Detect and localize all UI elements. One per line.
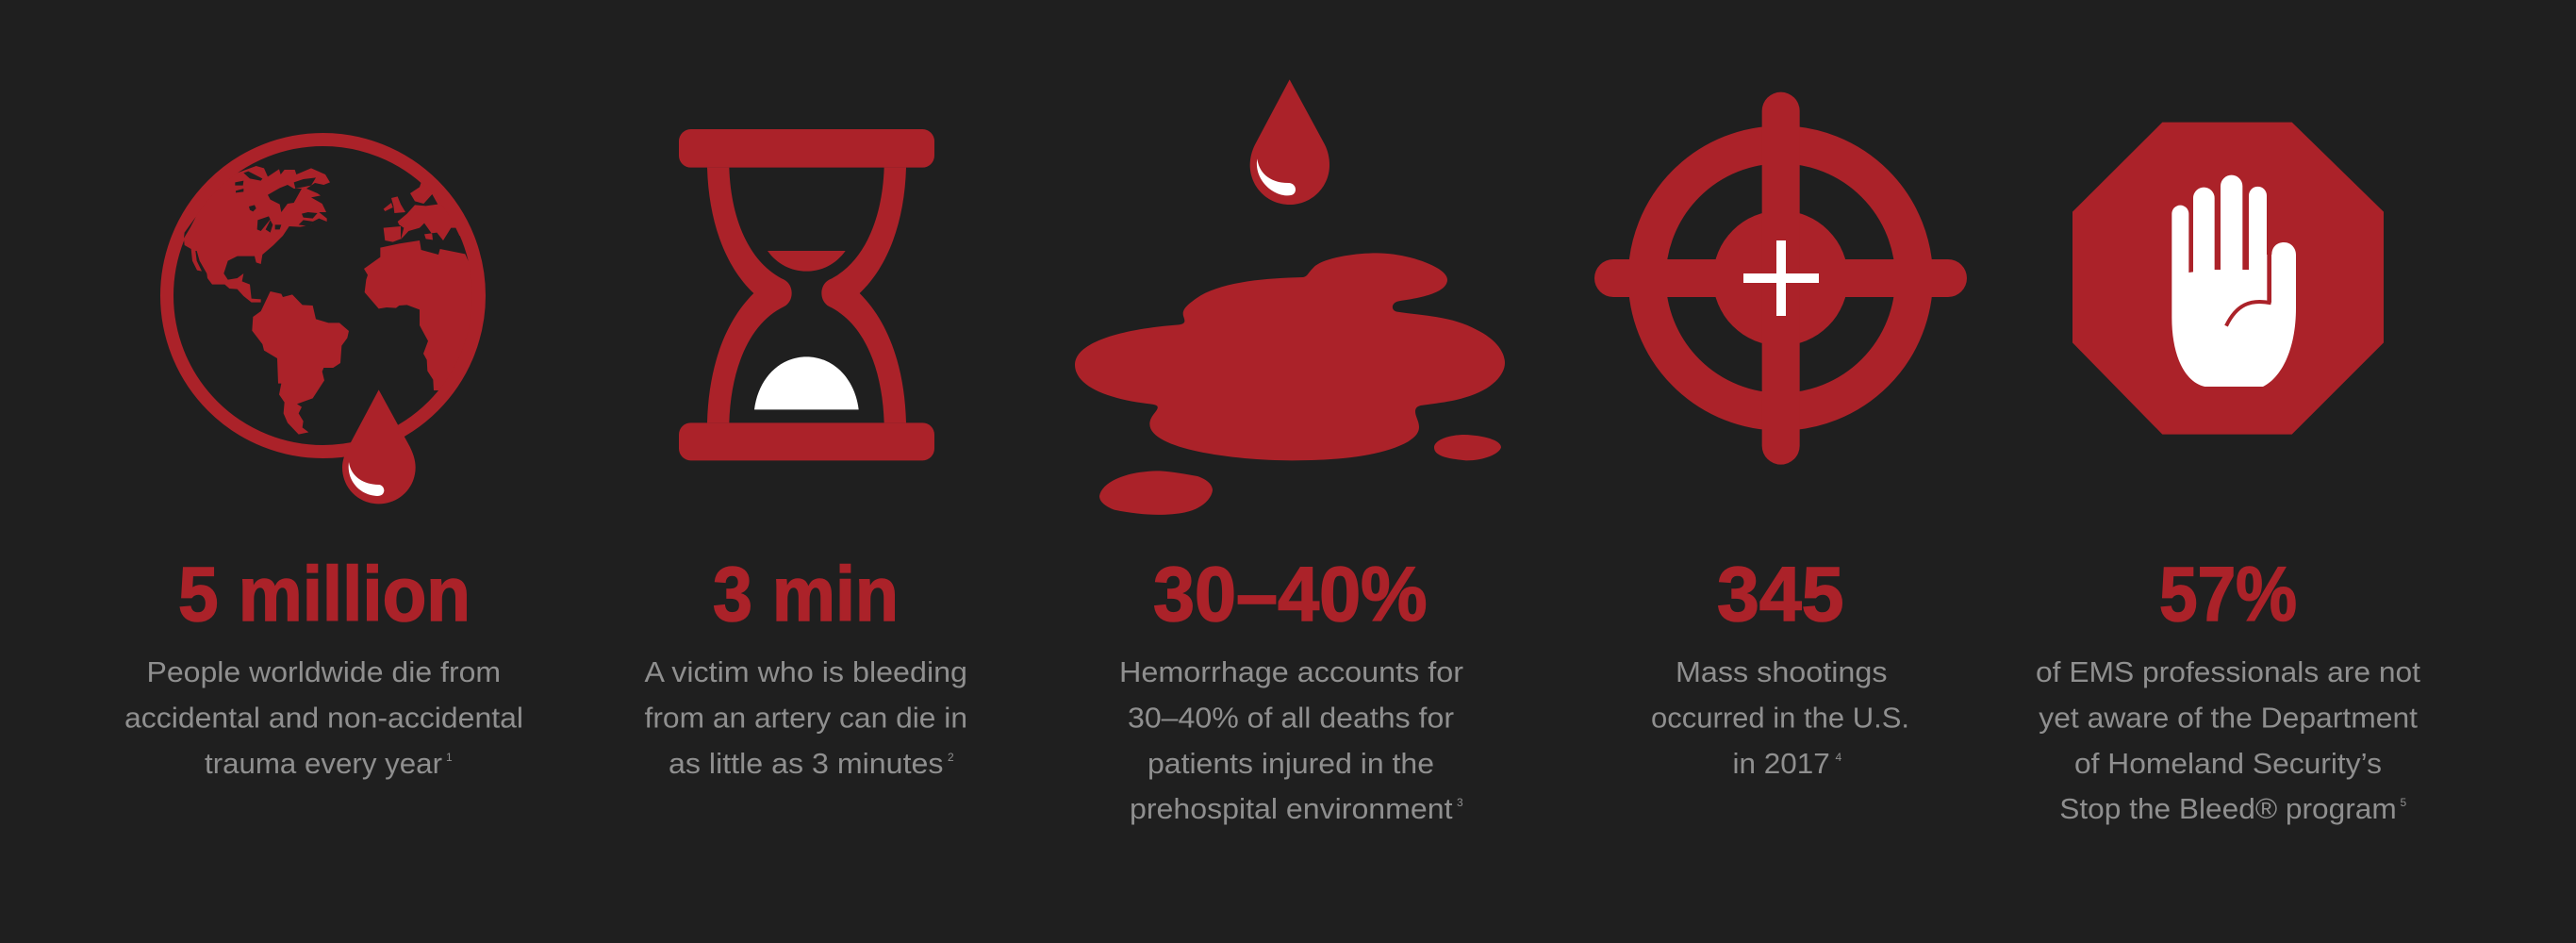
description: 57%: Stop the Bleed® program bbox=[2059, 792, 2397, 825]
panel: 30–40% bbox=[1075, 79, 1505, 825]
stat: 57%: 57% bbox=[2159, 552, 2297, 637]
description: 345: in 2017 bbox=[1733, 747, 1830, 780]
description: 30–40%: patients injured in the bbox=[1148, 747, 1434, 780]
description: 5 million: 1 bbox=[446, 751, 453, 764]
description: 57%: of EMS professionals are not bbox=[2036, 655, 2420, 688]
icon: bleeding globe bbox=[167, 140, 481, 504]
icon: blood drop and puddle bbox=[1075, 79, 1505, 515]
description: 30–40% bbox=[1119, 655, 1463, 825]
icon: hourglass bbox=[679, 129, 934, 460]
description: 30–40%: 3 bbox=[1457, 796, 1463, 809]
description: 345 bbox=[1651, 655, 1909, 780]
stat: 3 min: 3 min bbox=[713, 552, 899, 637]
description: 57%: yet aware of the Department bbox=[2039, 702, 2418, 734]
description: 345: occurred in the U.S. bbox=[1651, 702, 1909, 734]
description: 3 min: as little as 3 minutes bbox=[669, 747, 943, 780]
icon: stop sign with hand bbox=[2072, 123, 2384, 435]
description: 30–40%: 30–40% of all deaths for bbox=[1128, 702, 1454, 734]
panel: 3 min bbox=[645, 129, 967, 780]
description: 30–40%: prehospital environment bbox=[1130, 792, 1453, 825]
stat: 30–40%: 30–40% bbox=[1153, 552, 1428, 637]
panel: 5 million bbox=[124, 140, 523, 780]
description: 57%: of Homeland Security’s bbox=[2074, 747, 2382, 780]
description: 5 million: People worldwide die from bbox=[147, 655, 501, 688]
icon: crosshair target bbox=[1594, 92, 1967, 465]
panel: 57% bbox=[2036, 123, 2420, 825]
stat: 5 million: 5 million bbox=[178, 552, 471, 637]
description: 5 million: accidental and non-accidental bbox=[124, 702, 523, 734]
description: 57%: 5 bbox=[2401, 796, 2406, 809]
panel: 345 bbox=[1594, 92, 1967, 780]
description: 345: 4 bbox=[1835, 751, 1842, 764]
description: 345: Mass shootings bbox=[1676, 655, 1888, 688]
description: 57% bbox=[2036, 655, 2420, 825]
description: 3 min: from an artery can die in bbox=[645, 702, 967, 734]
description: 3 min: A victim who is bleeding bbox=[645, 655, 967, 688]
description: 5 million bbox=[124, 655, 523, 780]
description: 3 min bbox=[645, 655, 967, 780]
description: 30–40%: Hemorrhage accounts for bbox=[1119, 655, 1463, 688]
description: 5 million: trauma every year bbox=[205, 747, 442, 780]
description: 3 min: 2 bbox=[948, 751, 954, 764]
stat: 345: 345 bbox=[1717, 552, 1844, 637]
